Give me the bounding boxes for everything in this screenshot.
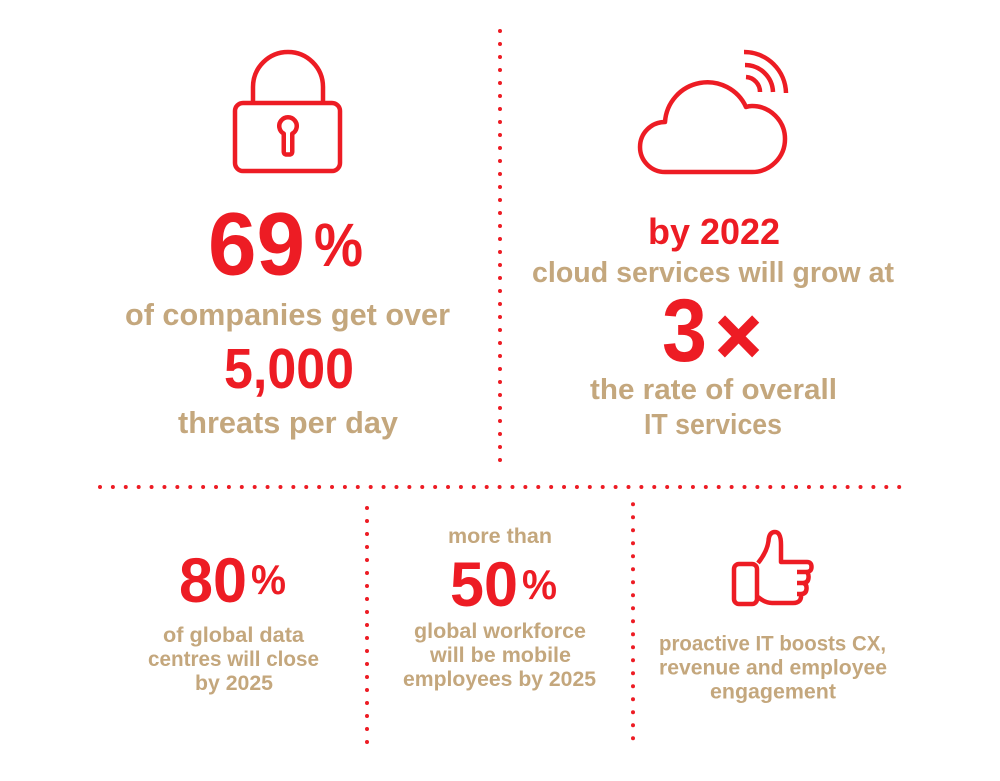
icon: thumbs up xyxy=(734,532,812,604)
text: proactive IT benefits: engagement xyxy=(710,680,836,704)
stat: 50%: 50 xyxy=(450,550,518,620)
text: proactive IT benefits xyxy=(659,632,887,704)
stat: 69% xyxy=(208,194,363,294)
stat: 3x xyxy=(662,280,762,380)
stat: 3x: 3 xyxy=(662,280,707,380)
text: data centre closure xyxy=(148,624,319,695)
text: of companies get over: of companies get over xyxy=(125,297,450,332)
text: mobile employees xyxy=(403,620,596,691)
stat: 50% xyxy=(450,550,557,620)
stat: 80%: % xyxy=(251,556,286,603)
stat: 3x: × xyxy=(716,291,762,380)
stat: 69%: 69 xyxy=(208,194,305,294)
text: mobile employees: global workforce xyxy=(414,620,586,643)
stat: 80% xyxy=(179,546,286,616)
text: data centre closure: of global data xyxy=(163,624,304,647)
stat: 69%: % xyxy=(314,211,363,279)
text: IT services: IT services xyxy=(644,409,782,441)
stat: 80%: 80 xyxy=(179,546,247,616)
icon: cloud with signal xyxy=(640,52,786,172)
icon: padlock xyxy=(235,52,340,171)
stat: 50%: % xyxy=(522,561,557,608)
panel: cloud growth xyxy=(532,52,894,441)
text: data centre closure: by 2025 xyxy=(195,672,273,695)
text: threats per day: threats per day xyxy=(178,405,399,440)
panel: data centres xyxy=(148,546,319,695)
stat: 5,000: 5,000 xyxy=(224,337,354,401)
text: more than: more than xyxy=(448,525,552,548)
text: cloud services will grow at: cloud services will grow at xyxy=(532,257,894,289)
text: proactive IT benefits: revenue and employee xyxy=(659,656,887,680)
text: proactive IT benefits: proactive IT boosts CX, xyxy=(659,632,886,656)
text: mobile employees: will be mobile xyxy=(429,644,571,667)
text: data centre closure: centres will close xyxy=(148,648,319,671)
panel: threats xyxy=(125,52,450,440)
text: by 2022: by 2022 xyxy=(648,211,780,252)
panel: proactive IT xyxy=(659,532,887,704)
panel: mobile workforce xyxy=(403,525,596,691)
text: mobile employees: employees by 2025 xyxy=(403,668,596,691)
text: the rate of overall: the rate of overall xyxy=(590,374,837,406)
